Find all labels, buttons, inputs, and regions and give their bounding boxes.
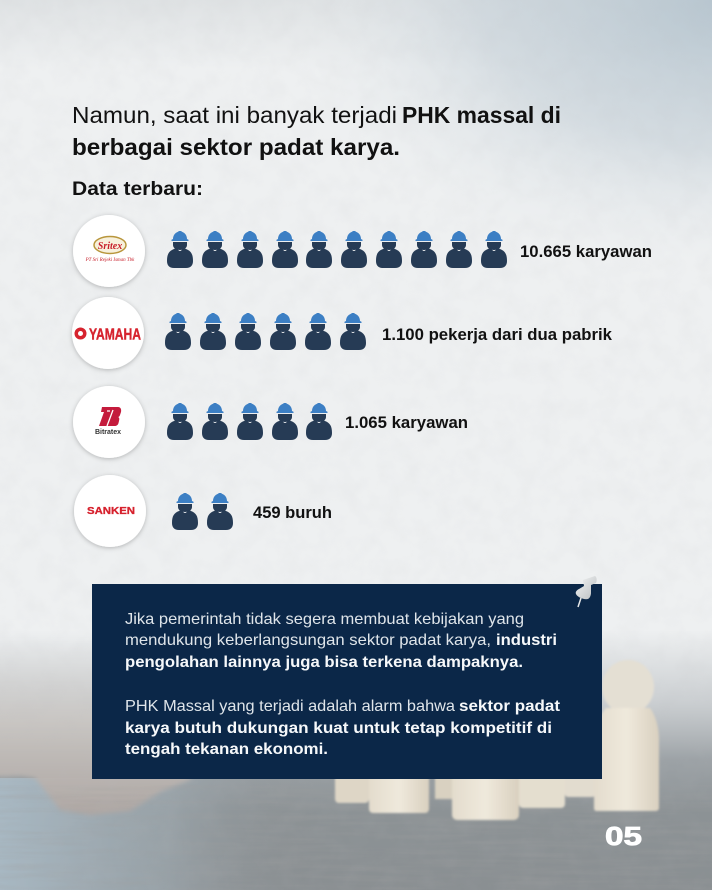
- logo: Sritex: PT Sri Rejeki Isman Tbk: [85, 258, 135, 263]
- logo: Yamaha: [72, 297, 144, 369]
- callout paragraph 1: industri: [496, 632, 557, 649]
- row: Bitratex: [73, 386, 468, 458]
- wooden figures: [335, 660, 659, 820]
- callout paragraph 1: mendukung keberlangsungan sektor padat karya,: [125, 632, 491, 649]
- heading: data terbaru: Data terbaru:: [72, 179, 203, 200]
- title: Namun, saat ini banyak terjadi: [72, 102, 397, 128]
- row: Sanken: [74, 475, 332, 547]
- logo: Yamaha: YAMAHA: [89, 326, 141, 344]
- workers: 5 icons: [167, 403, 332, 440]
- row: Sritex: [73, 215, 652, 287]
- callout panel: [92, 584, 602, 779]
- callout paragraph 1: Jika pemerintah tidak segera membuat kebijakan yang: [125, 611, 524, 628]
- title: PHK massal di: [402, 102, 561, 128]
- workers: 2 icons: [172, 493, 233, 530]
- row: Yamaha: [72, 297, 613, 369]
- logo: Bitratex: [73, 386, 145, 458]
- label: Sanken count: 459 buruh: [253, 504, 332, 522]
- icon: push pin: [576, 576, 597, 607]
- workers: 6 icons: [165, 313, 366, 350]
- title: [72, 102, 561, 160]
- logo: Sanken: SANKEN: [87, 506, 135, 517]
- callout paragraph 1: pengolahan lainnya juga bisa terkena dampaknya.: [125, 654, 523, 671]
- callout paragraph 2: PHK Massal yang terjadi adalah alarm bahwa: [125, 698, 455, 715]
- logo: Sritex: [73, 215, 145, 287]
- title: berbagai sektor padat karya.: [72, 134, 400, 160]
- logo: Sritex: Sritex: [98, 241, 122, 252]
- callout paragraph 2: sektor padat: [459, 698, 561, 715]
- callout paragraph 2: tengah tekanan ekonomi.: [125, 741, 328, 758]
- callout paragraph 1: [125, 611, 557, 671]
- page number: 05: [605, 821, 642, 851]
- callout paragraph 2: [125, 698, 561, 758]
- label: Bitratex count: 1.065 karyawan: [345, 414, 468, 432]
- workers: 10 icons: [167, 231, 507, 268]
- label: Sritex count: 10.665 karyawan: [520, 243, 652, 261]
- logo: Bitratex: Bitratex: [95, 429, 121, 436]
- callout paragraph 2: karya butuh dukungan kuat untuk tetap kompetitif di: [125, 720, 552, 737]
- logo: Sanken: [74, 475, 146, 547]
- label: Yamaha count: 1.100 pekerja dari dua pabrik: [382, 326, 613, 344]
